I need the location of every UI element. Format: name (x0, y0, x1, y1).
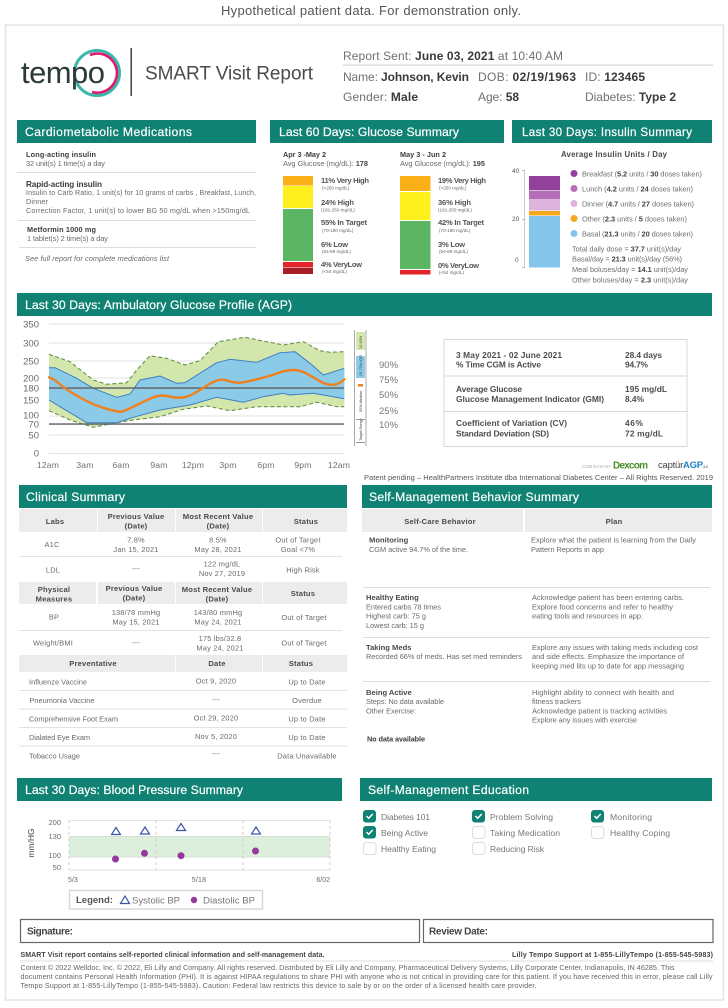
patient details: DOB: 02/19/1963 (478, 70, 576, 84)
signature box (20, 920, 420, 942)
x axis labels (37, 460, 350, 470)
clinical table: preventative: Nov 5, 2020 (195, 732, 237, 741)
panel: blood pressure summary (17, 778, 342, 909)
clinical table: physical measures: Most Recent Value (182, 585, 252, 594)
medication: metformin: 1 tablet(s) 2 time(s) a day (27, 234, 108, 243)
AGP statistics box: 3 May 2021 - 02 June 2021 (456, 350, 562, 360)
behavior: taking meds: and side effects. Emphasize the importance of (532, 652, 685, 661)
behavior: being active: Being Active (366, 688, 412, 697)
clinical table: labs: 122 mg/dL (204, 560, 240, 568)
AGP statistics box: Coefficient of Variation (CV) (456, 418, 567, 428)
checklist: Diabetes 101 (381, 812, 430, 822)
checklist (363, 810, 670, 854)
heading: Last 30 Days: Insulin Summary (522, 126, 692, 139)
clinical table: physical measures: Out of Target (281, 638, 327, 648)
behavior: monitoring: Monitoring (369, 536, 409, 544)
behavior: healthy eating: Highest carb: 75 g (366, 612, 426, 620)
blood pressure chart (26, 818, 330, 884)
range labels: Apr 3 - May 2: 24% High (321, 198, 354, 207)
checklist: Problem Solving (490, 812, 553, 822)
review date box: Review Date: (429, 926, 488, 938)
percentile labels: 75% (379, 375, 399, 386)
blood pressure chart: 100 (48, 851, 61, 860)
heading (17, 120, 256, 143)
clinical table: labs: LDL (46, 566, 60, 574)
AGP legend strip: Target Range (359, 418, 363, 441)
x axis labels: 6am (112, 460, 130, 470)
period one summary (283, 150, 368, 168)
x axis labels: 3am (76, 460, 94, 470)
heading (17, 778, 342, 801)
clinical table: preventative: Data Unavailable (277, 752, 337, 760)
clinical table: labs: (Date) (125, 522, 148, 530)
clinical table: physical measures: Status (291, 589, 315, 598)
range labels: May 3 - Jun 2: (>250 mg/dL) (439, 186, 467, 190)
AGP statistics box: 28.4 days (625, 350, 662, 360)
AGP legend strip: 50%-Median (359, 391, 363, 412)
clinical table: labs: Previous Value (108, 512, 164, 521)
behavior: taking meds: Explore any issues with taking meds including cost (532, 643, 698, 652)
AGP statistics box: 72 mg/dL (625, 428, 663, 438)
percentile labels (379, 360, 399, 431)
behavior: healthy eating: Healthy Eating (366, 593, 419, 602)
clinical table: physical measures: Previous Value (106, 584, 162, 593)
heading (362, 485, 712, 508)
clinical table: preventative: --- (212, 695, 220, 704)
y axis labels: 150 (23, 396, 39, 406)
clinical table: labs: A1C (45, 540, 60, 549)
behavior: monitoring: CGM active 94.7% of the time. (369, 545, 468, 554)
CGM data source logos: CGM DATA BY (582, 464, 611, 469)
y axis labels: 100 (23, 410, 39, 422)
clinical table: preventative: Date (208, 659, 226, 668)
clinical table: labs: Jan 15, 2021 (113, 545, 159, 554)
stacked insulin bar chart (512, 168, 560, 268)
behavior: taking meds (366, 643, 698, 670)
clinical table: labs: Nov 27, 2019 (199, 569, 245, 578)
AGP statistics box: 46% (625, 418, 644, 428)
legal text: Content © 2022 Welldoc, Inc. © 2022, Eli Lilly and Company. All rights reserved. Distributed by Eli Lilly and Company, Pharmaceutical Delivery Systems, Lilly Corporate Center, Indianapolis, IN 46285. This (20, 963, 675, 972)
x axis labels: 12am (37, 460, 59, 470)
clinical table: preventative: Influenze Vaccine (29, 678, 87, 686)
clinical table: preventative: Oct 29, 2020 (194, 714, 238, 722)
percentile labels: 10% (379, 420, 399, 431)
clinical table: labs (19, 509, 347, 578)
insulin totals: Basal/day = 21.3 unit(s)/day (56%) (572, 254, 682, 264)
clinical table: preventative: --- (212, 749, 220, 758)
blood pressure chart: 200 (48, 818, 61, 827)
behavior: monitoring: Pattern Reports in app (531, 545, 604, 554)
clinical table: physical measures: BP (49, 612, 59, 622)
medication: rapid-acting insulin: Insulin to Carb Ratio, 1 unit(s) for 10 grams of carbs , Breakfast, Lunch, (26, 190, 256, 197)
blood pressure chart: 50 (53, 863, 61, 872)
range labels: May 3 - Jun 2 (438, 176, 486, 275)
AGP statistics box (444, 340, 687, 446)
patient details: Name: Johnson, Kevin (343, 70, 469, 84)
y axis labels: 250 (23, 356, 39, 368)
AGP statistics box: Standard Deviation (SD) (456, 428, 549, 438)
clinical table: physical measures: Measures (36, 594, 72, 604)
panel: ambulatory glucose profile (17, 293, 713, 482)
behavior: being active: Acknowledge patient is tracking activities (532, 706, 667, 716)
clinical table: labs: Status (294, 517, 318, 526)
range labels: May 3 - Jun 2: (<54 mg/dL) (439, 270, 464, 275)
medication: long-acting insulin: 32 unit(s) 1 time(s) a day (26, 159, 105, 168)
range labels: May 3 - Jun 2: (181-250 mg/dL) (438, 208, 472, 212)
AGP statistics box: Average Glucose (456, 384, 522, 394)
clinical table: physical measures: 138/78 mmHg (112, 608, 160, 617)
AGP legend strip: 25-75%-IQR (359, 355, 363, 376)
range labels: May 3 - Jun 2: (70-180 mg/dL) (439, 228, 471, 233)
patient details: Diabetes: Type 2 (585, 90, 676, 104)
clinical table: labs: May 28, 2021 (194, 545, 242, 554)
clinical table: preventative (19, 655, 347, 760)
chart legend (70, 890, 262, 909)
AGP statistics box: 8.4% (625, 394, 645, 404)
range labels: May 3 - Jun 2: 36% High (438, 198, 471, 207)
medication: rapid-acting insulin: Rapid-acting insulin (26, 180, 102, 189)
behavior: healthy eating: Entered carbs 78 times (366, 602, 441, 612)
checklist: Healthy Eating (381, 844, 436, 854)
clinical table: preventative: Status (289, 659, 313, 668)
report title: SMART Visit Report (145, 64, 314, 84)
blood pressure chart: 6/02 (316, 877, 330, 884)
range labels: May 3 - Jun 2: 19% Very High (438, 176, 486, 185)
table header: Self-Care Behavior (404, 517, 476, 526)
clinical table: preventative: Dialated Eye Exam (29, 733, 90, 742)
behavior: being active: Highlight ability to connect with health and (532, 688, 674, 697)
y axis labels: 200 (23, 374, 39, 384)
behavior: being active: Explore any issues with exercise (532, 716, 637, 724)
CGM data source logos: captürAGP4.0 (658, 460, 709, 471)
signature box: Signature: (27, 926, 73, 938)
behavior: healthy eating: Explore food concerns and refer to healthy (532, 602, 673, 612)
checklist: Healthy Coping (610, 828, 670, 838)
chart legend: Systolic BP (132, 896, 180, 906)
x axis labels: 6pm (257, 460, 275, 470)
disclaimer banner: Hypothetical patient data. For demonstration only. (221, 3, 521, 18)
table header (362, 509, 712, 532)
insulin totals: Total daily dose = 37.7 unit(s)/day (572, 244, 681, 254)
percentile labels: 50% (379, 390, 399, 401)
AGP chart (23, 320, 350, 470)
range labels: May 3 - Jun 2: 42% In Target (438, 218, 484, 227)
AGP statistics box: 195 mg/dL (625, 384, 667, 394)
checklist: Taking Medication (490, 828, 560, 838)
logo divider (130, 48, 132, 96)
heading (19, 485, 347, 508)
blood pressure chart: mm/HG (26, 828, 36, 858)
medication: rapid-acting insulin: Dinner (26, 197, 49, 206)
clinical table: preventative: Up to Date (288, 678, 326, 686)
legal text: document contains Personal Health Information (PHI). It is against HIPAA regulations to share PHI with anyone who is not critical in providing care for this patient. If you have received this in error, please call Lilly (20, 972, 713, 981)
clinical table: labs: Out of Target (275, 536, 321, 544)
footer notes: SMART Visit report contains self-reported clinical information and self-management data. (20, 952, 325, 959)
behavior: monitoring: Explore what the patient is learning from the Daily (531, 536, 696, 544)
clinical table: physical measures: Weight/BMI (33, 638, 73, 648)
behavior: being active: fitness trackers (532, 697, 581, 706)
CGM data source logos: Dexcom (613, 460, 648, 472)
clinical table: physical measures: May 15, 2021 (112, 618, 160, 626)
y axis labels: 0 (34, 448, 39, 460)
period two summary: May 3 - Jun 2 (400, 150, 446, 159)
clinical table: preventative: Comprehensive Foot Exam (29, 714, 118, 724)
range labels: Apr 3 - May 2: (<54 mg/dL) (322, 269, 347, 274)
range labels: Apr 3 - May 2: 55% In Target (321, 218, 367, 227)
range labels: Apr 3 - May 2: (70-180 mg/dL) (322, 228, 354, 233)
medication: rapid-acting insulin: Correction Factor, 1 unit(s) to lower BG 50 mg/dL when >150mg/dL (26, 206, 250, 215)
panel: self-management education (360, 778, 712, 854)
clinical table: labs: Goal <7% (281, 545, 315, 554)
insulin legend: Dinner (4.7 units / 27 doses taken) (582, 200, 694, 208)
AGP legend strip (354, 330, 366, 446)
patent notice: Patent pending – HealthPartners Institute dba International Diabetes Center – All Rights Reserved. 2019 (364, 473, 713, 482)
clinical table: labs: Labs (46, 517, 64, 526)
clinical table: preventative: Oct 9, 2020 (196, 676, 236, 686)
range labels: Apr 3 - May 2: (>250 mg/dL) (322, 186, 350, 190)
insulin legend: Breakfast (5.2 units / 30 doses taken) (582, 170, 702, 178)
icon: tempo logo (21, 50, 120, 96)
clinical table: preventative: Pneumonia Vaccine (30, 696, 94, 705)
clinical table: physical measures (19, 582, 347, 652)
insulin totals (572, 244, 688, 284)
x axis labels: 12am (328, 460, 350, 470)
blood pressure chart: 5/3 (68, 877, 78, 884)
clinical table: preventative: Preventative (69, 659, 117, 668)
chart legend: Diastolic BP (203, 896, 255, 906)
diastolic markers (112, 848, 259, 862)
period two summary: Avg Glucose (mg/dL): 195 (400, 159, 485, 168)
behavior: healthy eating: Acknowledge patient has been entering carbs. (532, 593, 684, 602)
footer notes: Lilly Tempo Support at 1-855-LillyTempo (1-855-545-5983) (512, 952, 713, 959)
clinical table: physical measures: (Date) (206, 594, 229, 604)
insulin legend: Other (2.3 units / 5 doses taken) (582, 214, 687, 224)
chart legend: Legend: (76, 895, 113, 906)
checklist: Reducing Risk (490, 844, 545, 854)
patient details: Report Sent: June 03, 2021 at 10:40 AM (343, 49, 563, 63)
panel: clinical summary (19, 485, 347, 760)
range labels: Apr 3 - May 2: (54-69 mg/dL) (322, 249, 351, 254)
stacked insulin bar chart: 20 (512, 216, 520, 223)
heading: Last 60 Days: Glucose Summary (279, 125, 460, 139)
stacked bar: Apr 3 - May 2 (283, 176, 313, 274)
heading (270, 120, 504, 143)
clinical table: preventative: Up to Date (288, 714, 326, 724)
x axis labels: 3pm (219, 460, 237, 470)
legal text: Tempo Support at 1-855-LillyTempo (1-855-545-5983). Caution: Federal law restricts this device to sale by or on the order of a licensed health care provider. (20, 981, 536, 990)
clinical table: labs: 8.5% (209, 536, 227, 544)
heading: Last 30 Days: Blood Pressure Summary (25, 783, 244, 797)
medication: long-acting insulin: Long-acting insulin (26, 150, 96, 159)
period one summary: Avg Glucose (mg/dL): 178 (283, 159, 368, 168)
behavior: healthy eating: Lowest carb: 15 g (366, 621, 424, 630)
clinical table: physical measures: 175 lbs/32.8 (199, 634, 241, 643)
y axis labels: 70 (28, 420, 39, 430)
panel: self-management behavior summary (362, 485, 712, 744)
clinical table: physical measures: Physical (38, 585, 70, 594)
median line (49, 370, 344, 412)
clinical table: preventative: Overdue (292, 696, 322, 705)
behavior: healthy eating (366, 593, 684, 630)
blood pressure chart: 130 (48, 832, 61, 841)
stacked bar: May 3 - Jun 2 (400, 176, 430, 274)
x axis labels: 12pm (182, 460, 204, 470)
insulin legend (570, 170, 702, 238)
systolic markers (112, 824, 260, 834)
behavior: taking meds: Taking Meds (366, 643, 411, 652)
percentile labels: 25% (379, 406, 399, 417)
period two summary (400, 150, 485, 168)
period one summary: Apr 3 -May 2 (283, 150, 326, 159)
icon: tempo logo: tempo (21, 55, 105, 90)
insulin legend: Basal (21.3 units / 20 doses taken) (582, 230, 693, 238)
percentile outlines (49, 337, 344, 427)
clinical table: labs: (Date) (207, 522, 230, 530)
clinical table: physical measures: 143/80 mmHg (194, 608, 242, 617)
insulin legend: Lunch (4.2 units / 24 doses taken) (582, 184, 693, 194)
y axis labels: 50 (28, 430, 39, 442)
heading: Clinical Summary (26, 490, 126, 504)
clinical table: physical measures: May 24, 2021 (196, 644, 244, 652)
panel: cardiometabolic medications (17, 120, 256, 263)
y axis labels: 180 (23, 384, 39, 394)
range labels: Apr 3 - May 2: 6% Low (321, 240, 348, 249)
behavior: being active: Steps: No data available (366, 697, 444, 706)
patient details: ID: 123465 (585, 70, 645, 84)
heading: Self-Management Education (368, 783, 529, 797)
AGP statistics box: 94.7% (625, 360, 649, 370)
heading: Cardiometabolic Medications (25, 125, 192, 139)
clinical table: labs: Most Recent Value (183, 512, 253, 521)
range labels: May 3 - Jun 2: 3% Low (438, 240, 465, 249)
behavior: being active: No data available (367, 734, 425, 744)
percentile labels: 90% (379, 360, 399, 371)
insulin totals: Other boluses/day = 2.3 unit(s)/day (572, 276, 688, 284)
legal text (20, 963, 713, 990)
medication: metformin: Metformin 1000 mg (27, 225, 96, 234)
heading: Last 30 Days: Ambulatory Glucose Profile (AGP) (25, 298, 292, 312)
patient details (343, 49, 713, 104)
clinical table: physical measures: Out of Target (281, 613, 327, 622)
review date box (424, 920, 713, 942)
range labels: May 3 - Jun 2: (54-69 mg/dL) (439, 249, 468, 254)
10-90 percentile band (49, 337, 344, 427)
insulin totals: Meal boluses/day = 14.1 unit(s)/day (572, 265, 688, 274)
medication: rapid-acting insulin (26, 180, 256, 215)
AGP statistics box: % Time CGM is Active (456, 360, 541, 370)
clinical table: physical measures: May 24, 2021 (194, 618, 242, 626)
heading (17, 293, 712, 316)
range labels: Apr 3 - May 2: 11% Very High (321, 176, 369, 185)
CGM data source logos (582, 460, 709, 472)
table header: Plan (606, 517, 623, 526)
medication: long-acting insulin (26, 150, 105, 168)
clinical table: labs: High Risk (286, 566, 320, 574)
panel: insulin summary (512, 120, 712, 284)
clinical table: physical measures: --- (132, 638, 140, 647)
25-75 percentile band (49, 352, 344, 423)
heading (360, 778, 712, 801)
AGP legend strip: 10-90% (359, 335, 363, 349)
checklist: Monitoring (610, 812, 652, 822)
behavior: taking meds: keeping med lits up to date for app messaging (532, 662, 684, 670)
y axis labels: 300 (23, 338, 39, 350)
patient details: Gender: Male (343, 90, 418, 104)
stacked insulin bar chart: 40 (512, 168, 520, 175)
clinical table: preventative: Up to Date (288, 733, 326, 742)
footer notes (20, 952, 713, 962)
medication: metformin (27, 225, 108, 243)
clinical table: labs: 7.8% (127, 536, 145, 544)
stacked insulin bar chart: 0 (515, 257, 519, 264)
behavior: taking meds: Recorded 66% of meds. Has set med reminders (366, 652, 522, 661)
behavior: being active: Other Exercise: (366, 706, 416, 716)
behavior: monitoring (369, 536, 696, 554)
behavior: healthy eating: eating tools and resources in app. (532, 612, 643, 620)
patient details: Age: 58 (478, 90, 519, 104)
panel: glucose summary (270, 120, 504, 275)
x axis labels: 9am (150, 460, 168, 470)
AGP statistics box: Glucose Management Indicator (GMI) (456, 394, 604, 404)
clinical table: physical measures: (Date) (123, 594, 146, 602)
y axis labels (23, 320, 39, 460)
behavior: being active (366, 688, 674, 744)
y axis labels: 350 (23, 320, 39, 330)
target range lines (49, 387, 344, 425)
heading (512, 120, 712, 143)
blood pressure chart: 5/18 (192, 877, 206, 884)
chart title: Average Insulin Units / Day (561, 150, 668, 159)
range labels: Apr 3 - May 2: (181-250 mg/dL) (321, 208, 355, 212)
range labels: Apr 3 - May 2 (321, 176, 369, 274)
checklist: Being Active (381, 828, 428, 838)
x axis labels: 9pm (294, 460, 312, 470)
header: logo and report title (21, 48, 314, 96)
range labels: Apr 3 - May 2: 4% VeryLow (321, 260, 362, 269)
clinical table: labs: --- (132, 564, 140, 573)
heading: Self-Management Behavior Summary (369, 490, 580, 504)
clinical table: preventative: Tobacco Usage (29, 752, 80, 760)
note: See full report for complete medications list (25, 254, 170, 263)
range labels: May 3 - Jun 2: 0% VeryLow (438, 261, 479, 270)
